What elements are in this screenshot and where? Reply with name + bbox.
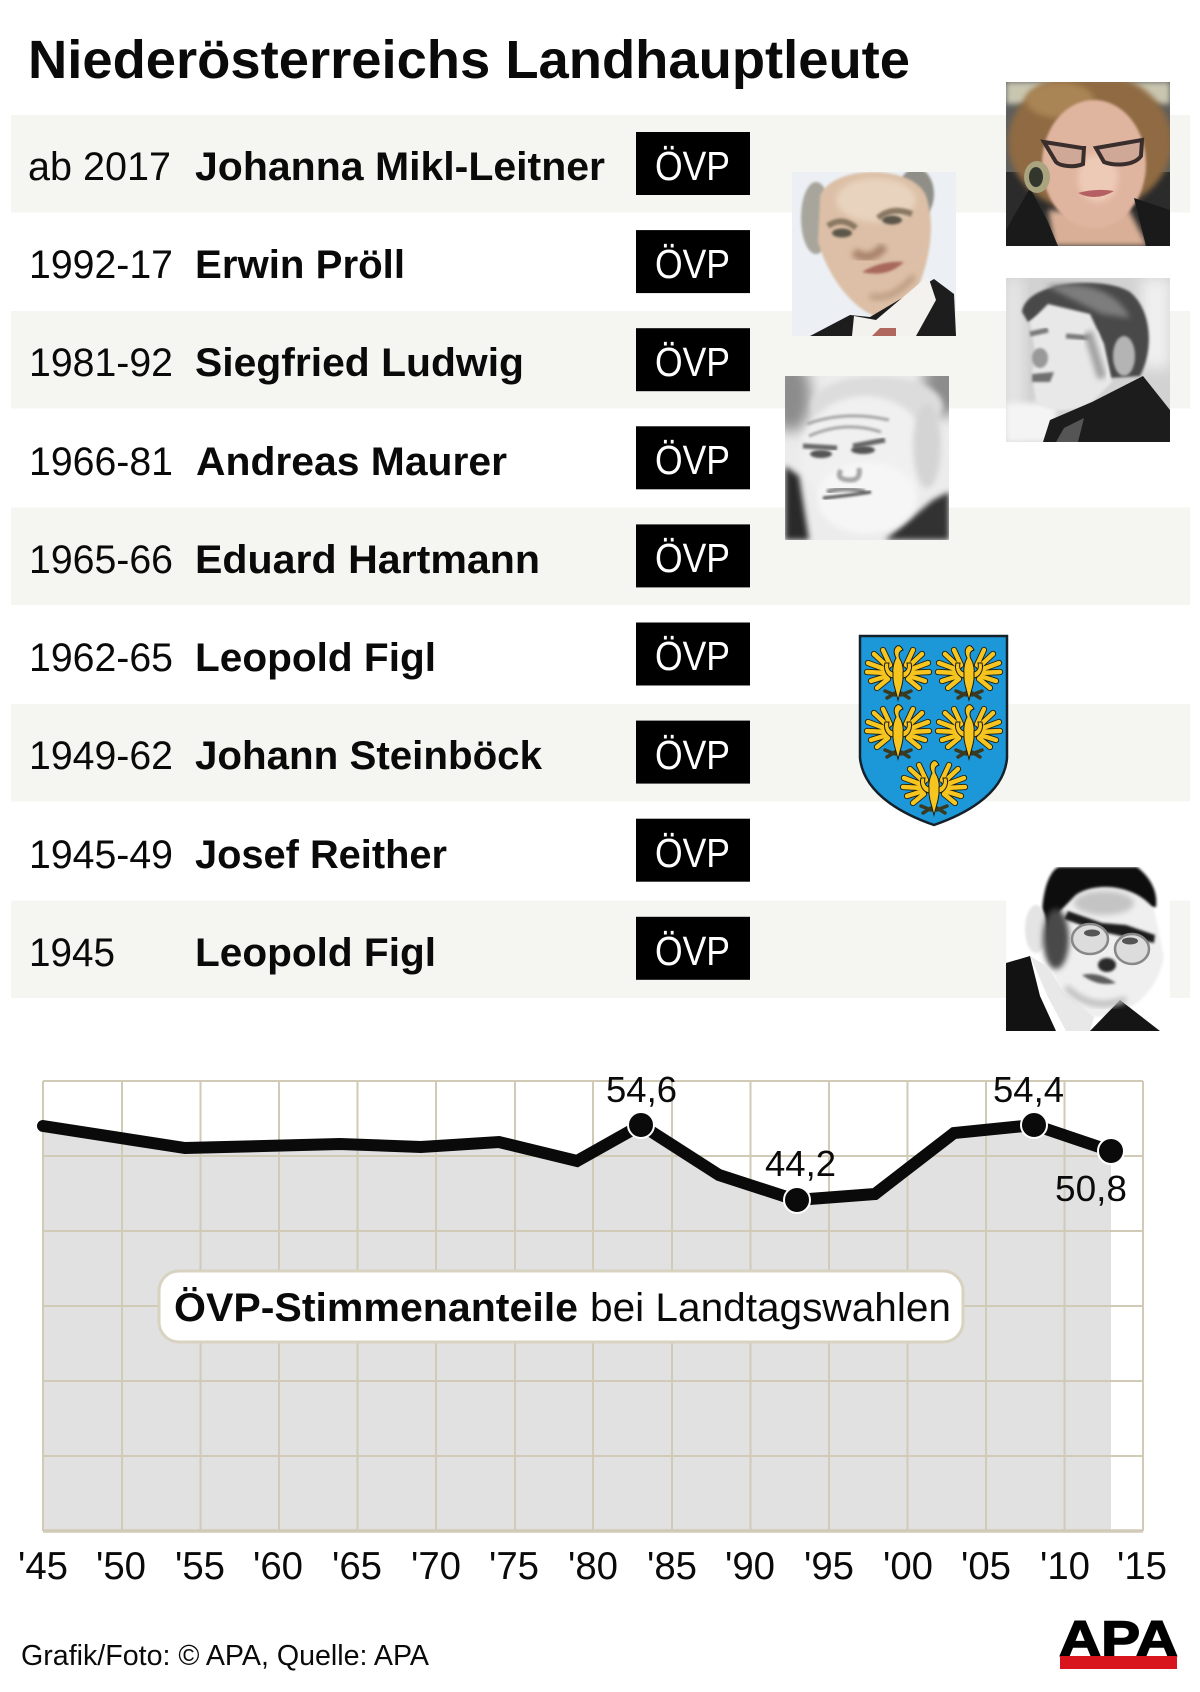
x-axis year labels: '55 [175,1545,225,1588]
chart legend label: bei Landtagswahlen [590,1286,951,1330]
row: 1966-81 [29,426,750,489]
row: 1965-66: 1965-66 [29,538,173,582]
x-axis year labels: '45 [18,1545,68,1588]
row: 1949-62 [29,721,750,784]
x-axis year labels [18,1545,1167,1588]
x-axis year labels: '85 [647,1545,697,1588]
icon: portrait Leopold Figl [1006,867,1170,1031]
source credit: Grafik/Foto: © APA, Quelle: APA [21,1640,430,1672]
row: 1992-17: ÖVP [655,241,730,287]
icon: portrait Andreas Maurer [785,376,949,540]
x-axis year labels: '60 [253,1545,303,1588]
row: 1965-66 [29,524,750,587]
data line [43,1125,1111,1200]
row: 1945 [29,917,750,980]
value labels: 50,8 [1055,1168,1127,1209]
title: Niederösterreichs Landhauptleute [28,30,910,90]
row: 1981-92: 1981-92 [29,341,173,385]
icon: APA logo: APA [1059,1611,1178,1667]
x-axis year labels: '00 [883,1545,933,1588]
row: 1962-65: ÖVP [655,633,730,679]
row: 1965-66: ÖVP [655,535,730,581]
row: ab 2017: ab 2017 [28,145,171,189]
row: 1945-49: ÖVP [655,830,730,876]
row: 1945: Leopold Figl [195,931,436,975]
row: 1945-49 [29,819,750,882]
row: 1992-17: 1992-17 [29,243,173,287]
x-axis year labels: '10 [1040,1545,1090,1588]
chart area fill [43,1125,1111,1531]
row: 1945: 1945 [29,931,115,975]
row: 1945-49: 1945-49 [29,833,173,877]
panel: list of governors [11,115,1190,998]
value labels [606,1069,1127,1209]
x-axis year labels: '05 [961,1545,1011,1588]
chart legend label: ÖVP-Stimmenanteile [174,1285,578,1330]
x-axis year labels: '65 [332,1545,382,1588]
row: 1966-81: 1966-81 [29,440,173,484]
row: 1949-62: 1949-62 [29,734,173,778]
row background bands [11,115,1190,998]
x-axis year labels: '80 [568,1545,618,1588]
row: ab 2017 [28,132,750,195]
value labels: 54,4 [993,1069,1064,1110]
icon: portrait Johanna Mikl-Leitner [1006,72,1172,246]
row: 1962-65: Leopold Figl [195,636,436,680]
chart legend label [159,1271,963,1342]
row: 1981-92: ÖVP [655,339,730,385]
row: 1966-81: ÖVP [655,437,730,483]
x-axis year labels: '90 [725,1545,775,1588]
x-axis year labels: '15 [1117,1545,1167,1588]
icon: portrait Siegfried Ludwig [1006,278,1170,442]
x-axis year labels: '70 [411,1545,461,1588]
icon: portrait Erwin Pröll [792,168,956,336]
value labels: 54,6 [606,1069,677,1110]
row: ab 2017: Johanna Mikl-Leitner [195,145,605,189]
row: ab 2017: ÖVP [655,143,730,189]
row: 1962-65 [29,622,750,686]
row: 1992-17 [29,230,750,293]
x-axis year labels: '50 [96,1545,146,1588]
data points [628,1112,1124,1213]
icon: coat of arms of Lower Austria [860,636,1007,825]
chart: ÖVP vote share [18,1069,1167,1588]
x-axis year labels: '95 [804,1545,854,1588]
row: 1945-49: Josef Reither [195,833,447,877]
row: 1949-62: Johann Steinböck [195,734,543,778]
row: 1962-65: 1962-65 [29,636,173,680]
row: 1981-92 [29,328,750,391]
row: 1965-66: Eduard Hartmann [195,538,540,582]
row: 1949-62: ÖVP [655,732,730,778]
x-axis year labels: '75 [489,1545,539,1588]
row: 1981-92: Siegfried Ludwig [195,341,524,385]
value labels: 44,2 [765,1143,836,1184]
row: 1992-17: Erwin Pröll [195,243,405,287]
row: 1966-81: Andreas Maurer [196,440,507,484]
row: 1945: ÖVP [655,928,730,974]
